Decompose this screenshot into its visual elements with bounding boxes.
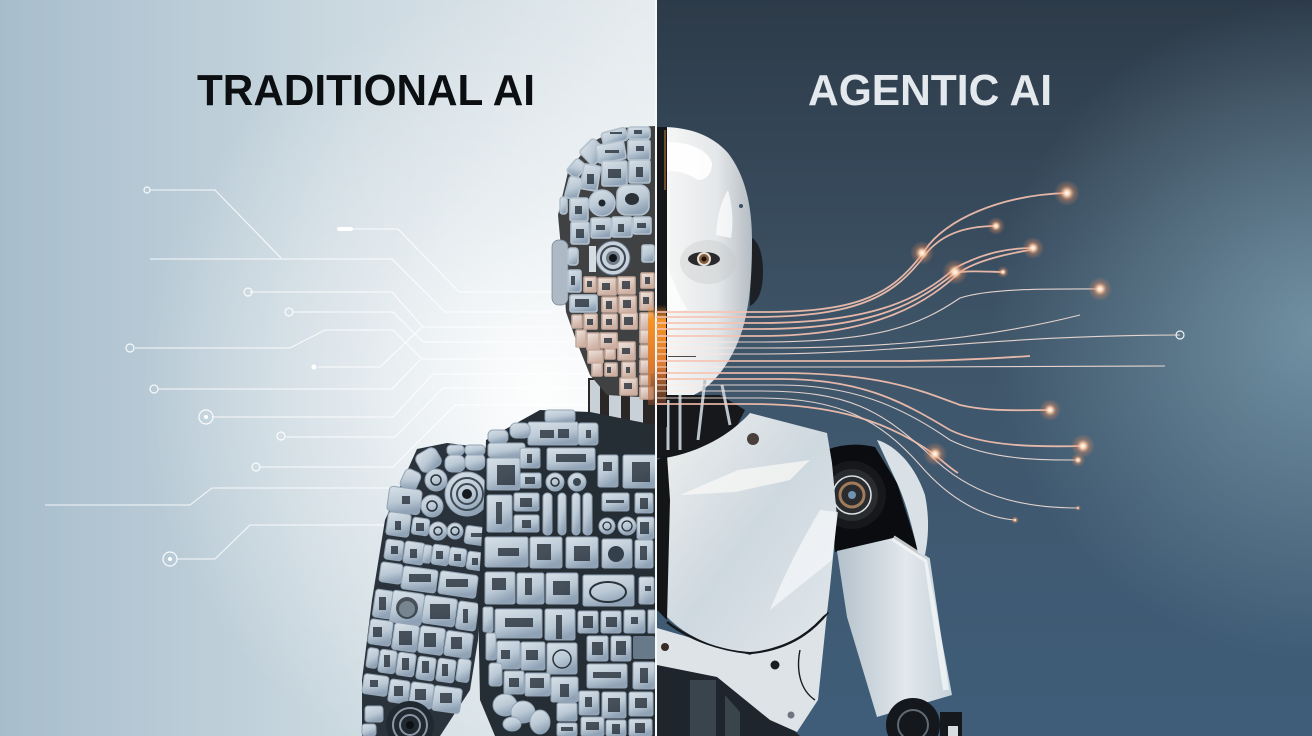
robot: modular tile body, traditional side (362, 126, 656, 736)
panel: agentic AI background (656, 0, 1312, 736)
joint: left wrist (386, 701, 434, 736)
panel: traditional AI background (0, 0, 656, 736)
title: agentic AI: AGENTIC AI (808, 66, 1052, 115)
ear: grey side panel (552, 240, 568, 305)
cheek shading (680, 240, 736, 284)
robot head: agentic side (657, 127, 763, 458)
wrist joint (886, 698, 962, 736)
shoulder cap (877, 440, 928, 555)
shoulder joint (818, 445, 920, 556)
arm: tiled left arm (362, 443, 493, 736)
head: tiled left head (552, 126, 655, 399)
lower abdomen shell (657, 613, 827, 732)
center seam with orange glow (648, 127, 667, 427)
eye: mechanical left eye (589, 241, 630, 275)
machinery: lower torso (657, 660, 800, 736)
data lines: agentic AI (656, 180, 1184, 524)
glow points (910, 180, 1112, 524)
neck: machinery (657, 380, 745, 458)
forehead highlight (667, 142, 712, 180)
torso: tiled chest (478, 410, 656, 736)
face: white glossy shell (666, 127, 752, 400)
title: traditional AI: TRADITIONAL AI (197, 66, 535, 115)
robot body: agentic side (657, 413, 962, 736)
neck: traditional tubes (588, 378, 655, 428)
chest plate (665, 413, 837, 652)
upper arm (837, 538, 952, 717)
ear: dark headphone (750, 237, 763, 306)
eye: human-like right eye (688, 252, 720, 266)
divider line (655, 0, 657, 736)
circuit lines: traditional AI (45, 187, 590, 566)
